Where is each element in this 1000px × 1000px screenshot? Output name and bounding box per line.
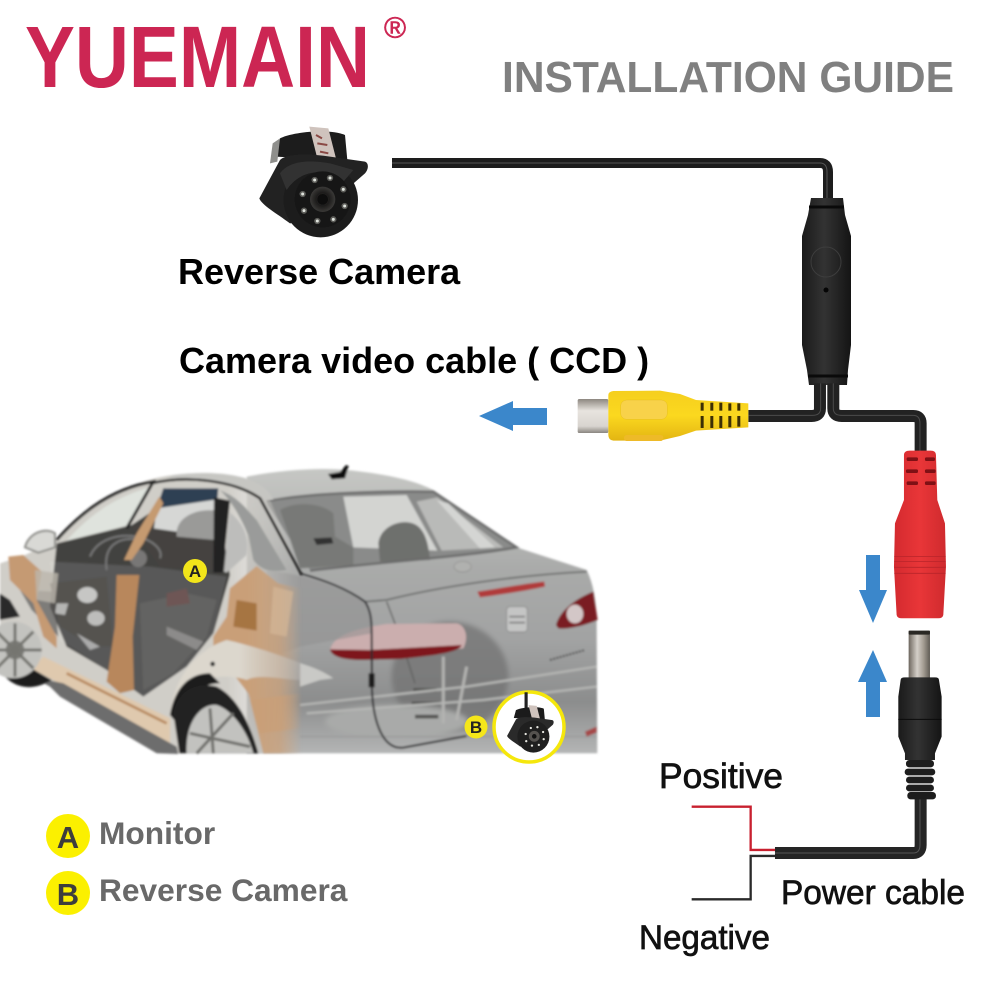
car: translucent front body: [0, 475, 302, 753]
car: lower cabin grey: [140, 593, 217, 690]
car: interior: [50, 497, 230, 697]
marker: A on car: A: [189, 562, 201, 581]
car: trunk badge: [507, 607, 527, 632]
car: front half: [0, 473, 302, 754]
car: rear wheel seen through body: [392, 622, 508, 732]
car: front wheel left: [0, 593, 52, 687]
video cable with inline control box: [392, 163, 851, 385]
car: orange B pillar: [107, 575, 139, 693]
car: trunk crease: [365, 572, 587, 602]
car: engine bay: [50, 577, 113, 647]
brand logo: ®: [384, 12, 406, 45]
car: fender arch: [170, 640, 302, 717]
marker: B on car: [464, 716, 488, 738]
car: orange front structure: [8, 555, 57, 648]
arrow: left: [479, 401, 547, 431]
car: orange behind wheel: [250, 693, 302, 753]
car: right tail light: [556, 592, 598, 629]
legend: B reverse camera: Reverse Camera: [99, 872, 348, 908]
car: rocker dark: [32, 677, 178, 754]
car: roof frame: [152, 479, 302, 575]
car: left tail light: [330, 623, 466, 657]
car: orange A pillar: [124, 497, 163, 560]
car: front window: [67, 487, 152, 541]
car: rear window: [267, 492, 517, 570]
car: door pillar: [213, 497, 230, 573]
legend: A monitor: [46, 814, 215, 858]
car: camera wire: [300, 573, 467, 748]
car: rear body: [247, 469, 597, 753]
label: power cable: Power cable: [781, 874, 965, 912]
label: negative: Negative: [639, 919, 770, 957]
car: door sill: [32, 657, 170, 743]
car: steering wheel: [90, 536, 161, 570]
label: positive: Positive: [659, 757, 783, 796]
car: rear door wheel: [173, 685, 258, 753]
car cutaway illustration: [0, 465, 598, 754]
car: rear door glass: [157, 488, 218, 508]
car: rear half: [247, 465, 598, 753]
arrow: up: [858, 650, 887, 717]
car: third brake light: [477, 582, 545, 597]
callout: camera in yellow ring: [494, 692, 564, 762]
title: installation guide: INSTALLATION GUIDE: [502, 53, 954, 102]
legend: B reverse camera: [46, 871, 348, 915]
power cable with DC male plug: [692, 631, 942, 899]
car: rear window frame: [267, 491, 517, 571]
car: mirror: [25, 531, 55, 553]
yellow RCA connector with split cable: [578, 383, 921, 453]
legend: A monitor: Monitor: [99, 815, 215, 851]
brand logo: YUEMAIN: [25, 9, 370, 106]
icon: reverse camera: [259, 127, 368, 237]
marker: B on car: B: [470, 718, 482, 737]
marker: A on car: [183, 559, 207, 583]
car: orange rear structure: [213, 566, 302, 733]
arrow: down: [859, 555, 887, 623]
label: camera video cable: Camera video cable ( CCD ): [179, 340, 649, 381]
car: shoulder panel: [267, 570, 372, 660]
legend: A monitor: A: [57, 820, 79, 855]
car: antenna: [328, 465, 349, 479]
legend: B reverse camera: B: [57, 877, 79, 912]
label: reverse camera: Reverse Camera: [178, 251, 461, 292]
red DC female connector: [894, 451, 946, 618]
